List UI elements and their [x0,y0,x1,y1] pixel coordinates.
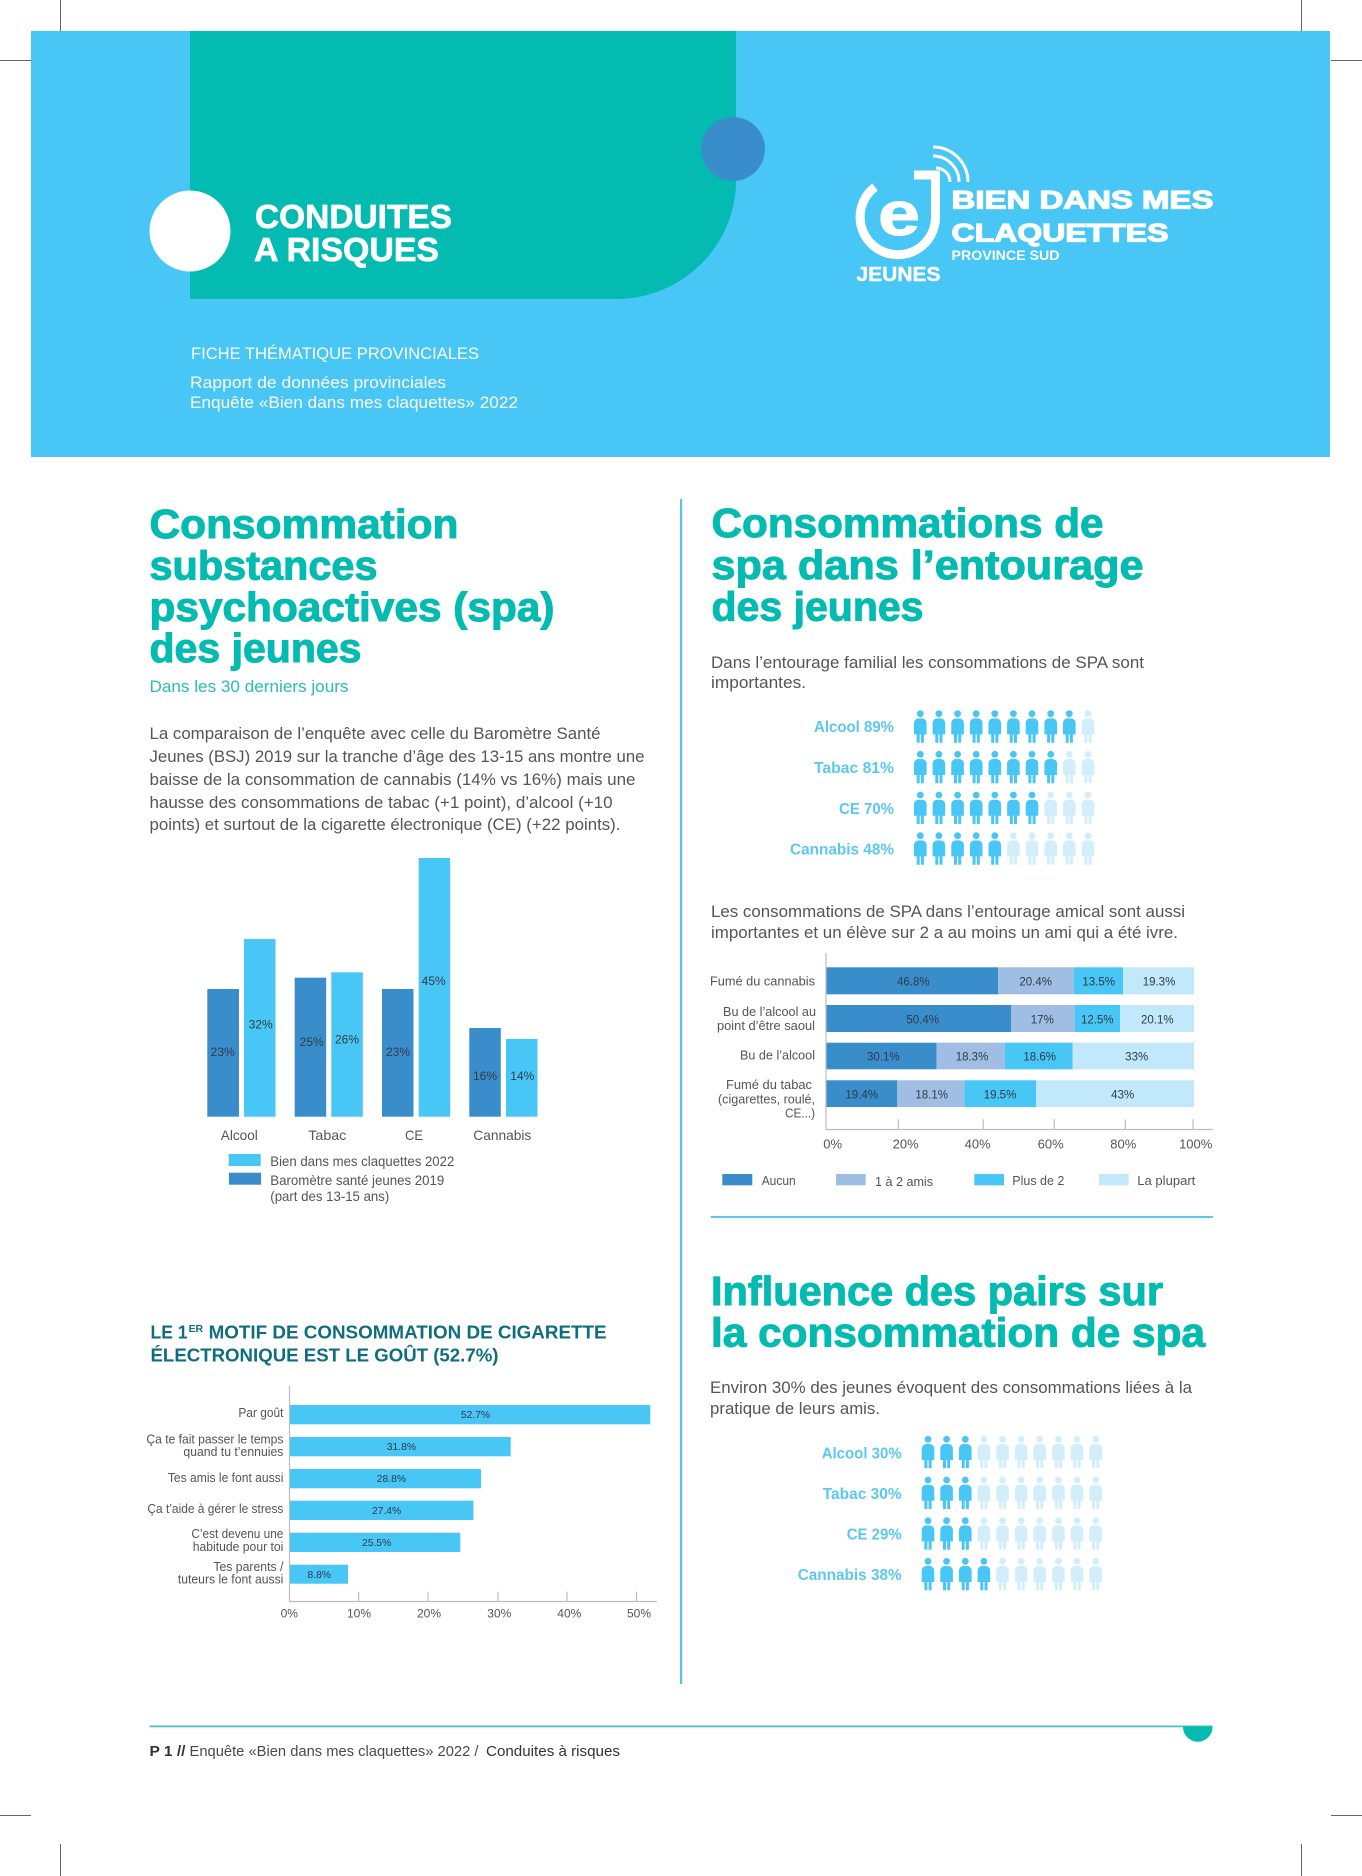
heading: premier motif cigarette electronique: LE 1 [150,1322,188,1342]
chart: column chart 2019 vs 2022: 32% [249,1018,273,1032]
row: bu de l'alcool au point d'être saoul: 20.1% [1141,1014,1174,1026]
chart: motifs horizontal bars: 25.5% [362,1538,391,1549]
chart: motifs horizontal bars: 8.8% [308,1570,331,1581]
heading: consommations de spa dans l'entourage: Consommations de [712,500,1104,546]
heading: influence des pairs: Influence des pairs sur [711,1268,1163,1314]
pictogram: influence des pairs: CE 29% [847,1526,902,1543]
title: CONDUITES [255,198,452,235]
chart: column chart 2019 vs 2022: 14% [510,1069,535,1083]
row: fumé du cannabis: 46.8% [897,976,930,988]
chart: motifs horizontal bars: Tes parents / [213,1560,284,1574]
chart: motifs horizontal bars: habitude pour toi [193,1540,283,1554]
subheading: Dans les 30 derniers jours [150,677,348,696]
row: bu de l'alcool: 30.1% [867,1052,900,1064]
heading: consommation substances psychoactives: psychoactives (spa) [150,584,554,630]
header subtitle [190,344,518,412]
heading: consommation substances psychoactives: Consommation [150,501,458,547]
heading: influence des pairs: la consommation de spa [711,1310,1206,1356]
panel: header banner [31,31,1330,457]
paragraph: entourage familial [711,653,1144,692]
heading: consommations de spa dans l'entourage [712,500,1144,630]
logo: Bien dans mes claquettes: JEUNES [856,264,940,286]
row: fumé du cannabis: 13.5% [1082,976,1115,988]
chart: motifs horizontal bars: Ça te fait passer le temps [146,1432,283,1446]
paragraph: comparaison: La comparaison de l’enquête avec celle du Baromètre Santé [150,724,600,743]
chart: motifs horizontal bars: tuteurs le font aussi [178,1572,283,1586]
heading: premier motif cigarette electronique: ER [189,1323,204,1335]
row: bu de l'alcool: 18.6% [1023,1052,1056,1064]
row: bu de l'alcool au point d'être saoul [826,1005,1194,1032]
chart: motifs horizontal bars: 0% [281,1606,298,1620]
footer text: Conduites à risques [486,1743,620,1760]
chart: motifs horizontal bars: 27.4% [372,1506,401,1517]
pictogram: entourage familial: Alcool 89% [814,719,894,736]
chart: stacked bars entourage amical: 0% [823,1136,843,1151]
chart: column chart 2019 vs 2022: 23% [386,1045,410,1059]
title: A RISQUES [254,231,439,268]
chart: column chart 2019 vs 2022: Cannabis [473,1127,531,1143]
heading: consommation substances psychoactives [150,501,554,671]
chart: stacked bars entourage amical: 100% [1179,1136,1213,1151]
chart: motifs horizontal bars: 28.8% [377,1474,406,1485]
chart: column chart 2019 vs 2022: 25% [300,1035,324,1049]
row: fumé du tabac: 19.4% [845,1090,878,1102]
footer [150,1726,1212,1760]
paragraph: entourage amical: Les consommations de SPA dans l’entourage amical sont aussi [711,902,1185,921]
chart: column chart 2019 vs 2022: 45% [422,974,446,988]
logo: Bien dans mes claquettes: PROVINCE SUD [952,247,1060,263]
row: fumé du tabac: 43% [1111,1090,1134,1102]
chart: motifs horizontal bars: 31.8% [387,1442,416,1453]
chart: stacked bars entourage amical [710,953,1213,1189]
green title block [190,31,736,299]
chart: stacked bars entourage amical: Bu de l’alcool au [723,1005,816,1019]
legend: Bien dans mes claquettes 2022 [270,1153,454,1169]
legend [722,1173,1196,1189]
legend: (part des 13-15 ans) [270,1188,389,1204]
legend: Plus de 2 [1012,1173,1064,1188]
chart: stacked bars entourage amical: point d’être saoul [717,1019,815,1033]
row: bu de l'alcool au point d'être saoul: 12.5% [1081,1014,1114,1026]
heading: consommations de spa dans l'entourage: spa dans l’entourage [712,542,1144,588]
heading: consommation substances psychoactives: substances [150,542,378,588]
title [254,198,452,268]
footer text: Enquête «Bien dans mes claquettes» 2022 / [190,1743,479,1760]
heading: consommation substances psychoactives: des jeunes [150,625,362,671]
chart: column chart 2019 vs 2022: 26% [335,1032,359,1046]
chart: column chart 2019 vs 2022: 16% [473,1069,497,1083]
chart: column chart 2019 vs 2022: CE [405,1127,423,1143]
paragraph: comparaison: Jeunes (BSJ) 2019 sur la tranche d’âge des 13-15 ans montre une [150,747,644,766]
pictogram: entourage familial [790,710,1094,865]
legend: Aucun [762,1173,796,1188]
pictogram: entourage familial: Cannabis 48% [790,842,894,858]
chart: motifs horizontal bars: 30% [487,1606,512,1620]
row: fumé du tabac: 19.5% [984,1090,1016,1102]
logo: Bien dans mes claquettes [856,147,1214,286]
pictogram: entourage familial: CE 70% [839,801,894,818]
row: fumé du cannabis: 19.3% [1143,976,1175,988]
chart: motifs horizontal bars: C’est devenu une [191,1527,283,1541]
pictogram: influence des pairs: Tabac 30% [823,1486,902,1503]
chart: stacked bars entourage amical: 40% [965,1136,991,1151]
chart: motifs horizontal bars: quand tu t’ennuies [183,1445,283,1459]
chart: column chart 2019 vs 2022: Tabac [308,1127,346,1143]
chart: stacked bars entourage amical: 60% [1038,1136,1064,1151]
chart: motifs horizontal bars: 52.7% [461,1410,490,1421]
chart: motifs horizontal bars: Tes amis le font aussi [168,1471,283,1485]
logo: Bien dans mes claquettes: e [878,180,920,249]
chart: stacked bars entourage amical: 80% [1110,1136,1137,1151]
legend: La plupart [1137,1173,1196,1188]
heading: consommations de spa dans l'entourage: des jeunes [712,584,924,630]
paragraph: comparaison: points) et surtout de la cigarette électronique (CE) (+22 points). [150,815,620,834]
row: bu de l'alcool: 33% [1125,1052,1148,1064]
paragraph: influence: Environ 30% des jeunes évoquent des consommations liées à la [710,1378,1193,1397]
row: bu de l'alcool au point d'être saoul: 50.4% [906,1014,939,1026]
heading: premier motif cigarette electronique [150,1322,607,1366]
legend: Baromètre santé jeunes 2019 [270,1172,444,1188]
heading: premier motif cigarette electronique: ÉLECTRONIQUE EST LE GOÛT (52.7%) [150,1344,498,1366]
heading: premier motif cigarette electronique: MOTIF DE CONSOMMATION DE CIGARETTE [209,1322,607,1342]
header subtitle: FICHE THÉMATIQUE PROVINCIALES [191,344,479,363]
white circle decoration [150,190,230,272]
chart: motifs horizontal bars: 20% [417,1606,441,1620]
footer text: P 1 // [150,1743,186,1760]
row: bu de l'alcool [826,1043,1194,1069]
paragraph: entourage amical: importantes et un élève sur 2 a au moins un ami qui a été ivre. [711,923,1178,942]
chart: stacked bars entourage amical: Fumé du tabac [726,1078,812,1092]
footer text [150,1743,620,1760]
pictogram: influence des pairs: Alcool 30% [822,1445,902,1462]
row: fumé du tabac: 18.1% [915,1090,948,1102]
chart: motifs horizontal bars: 40% [557,1606,582,1620]
pictogram: influence des pairs: Cannabis 38% [798,1567,902,1584]
chart: stacked bars entourage amical: CE...) [785,1107,815,1121]
chart: motifs horizontal bars: Par goût [238,1406,284,1420]
row: fumé du cannabis: 20.4% [1019,976,1052,988]
paragraph: entourage familial: importantes. [711,673,806,692]
row: fumé du cannabis [826,967,1194,994]
legend [229,1153,454,1204]
legend: 1 à 2 amis [875,1174,933,1189]
chart: column chart 2019 vs 2022: 23% [211,1045,235,1059]
header subtitle: Enquête «Bien dans mes claquettes» 2022 [190,393,518,412]
blue circle decoration [701,117,765,181]
chart: column chart 2019 vs 2022 [207,858,538,1204]
logo: Bien dans mes claquettes: BIEN DANS MES [952,186,1214,214]
paragraph: comparaison: baisse de la consommation de cannabis (14% vs 16%) mais une [150,770,636,789]
chart: motifs horizontal bars: Ça t’aide à gérer le stress [147,1502,283,1516]
row: fumé du tabac [826,1080,1194,1107]
row: bu de l'alcool au point d'être saoul: 17% [1031,1014,1054,1026]
paragraph: comparaison: hausse des consommations de tabac (+1 point), d’alcool (+10 [150,793,612,812]
heading: influence des pairs [711,1268,1206,1356]
chart: motifs horizontal bars [146,1386,657,1620]
chart: stacked bars entourage amical: Fumé du cannabis [710,975,815,989]
pictogram: entourage familial: Tabac 81% [814,760,894,777]
chart: stacked bars entourage amical: Bu de l’alcool [740,1048,815,1062]
chart: stacked bars entourage amical: 20% [893,1136,919,1151]
paragraph: entourage familial: Dans l’entourage familial les consommations de SPA sont [711,653,1144,672]
pictogram: influence des pairs [798,1436,1102,1590]
paragraph: influence [710,1378,1193,1418]
chart: column chart 2019 vs 2022: Alcool [221,1127,258,1143]
row: bu de l'alcool: 18.3% [956,1052,988,1064]
chart: stacked bars entourage amical: (cigarettes, roulé, [718,1092,815,1106]
paragraph: influence: pratique de leurs amis. [710,1399,880,1418]
chart: motifs horizontal bars: 10% [347,1606,371,1620]
logo: Bien dans mes claquettes: CLAQUETTES [952,220,1168,248]
paragraph: entourage amical [711,902,1185,942]
chart: motifs horizontal bars: 50% [627,1606,651,1620]
footer teal half circle [1183,1726,1212,1742]
header subtitle: Rapport de données provinciales [190,373,446,392]
paragraph: comparaison [150,724,644,834]
